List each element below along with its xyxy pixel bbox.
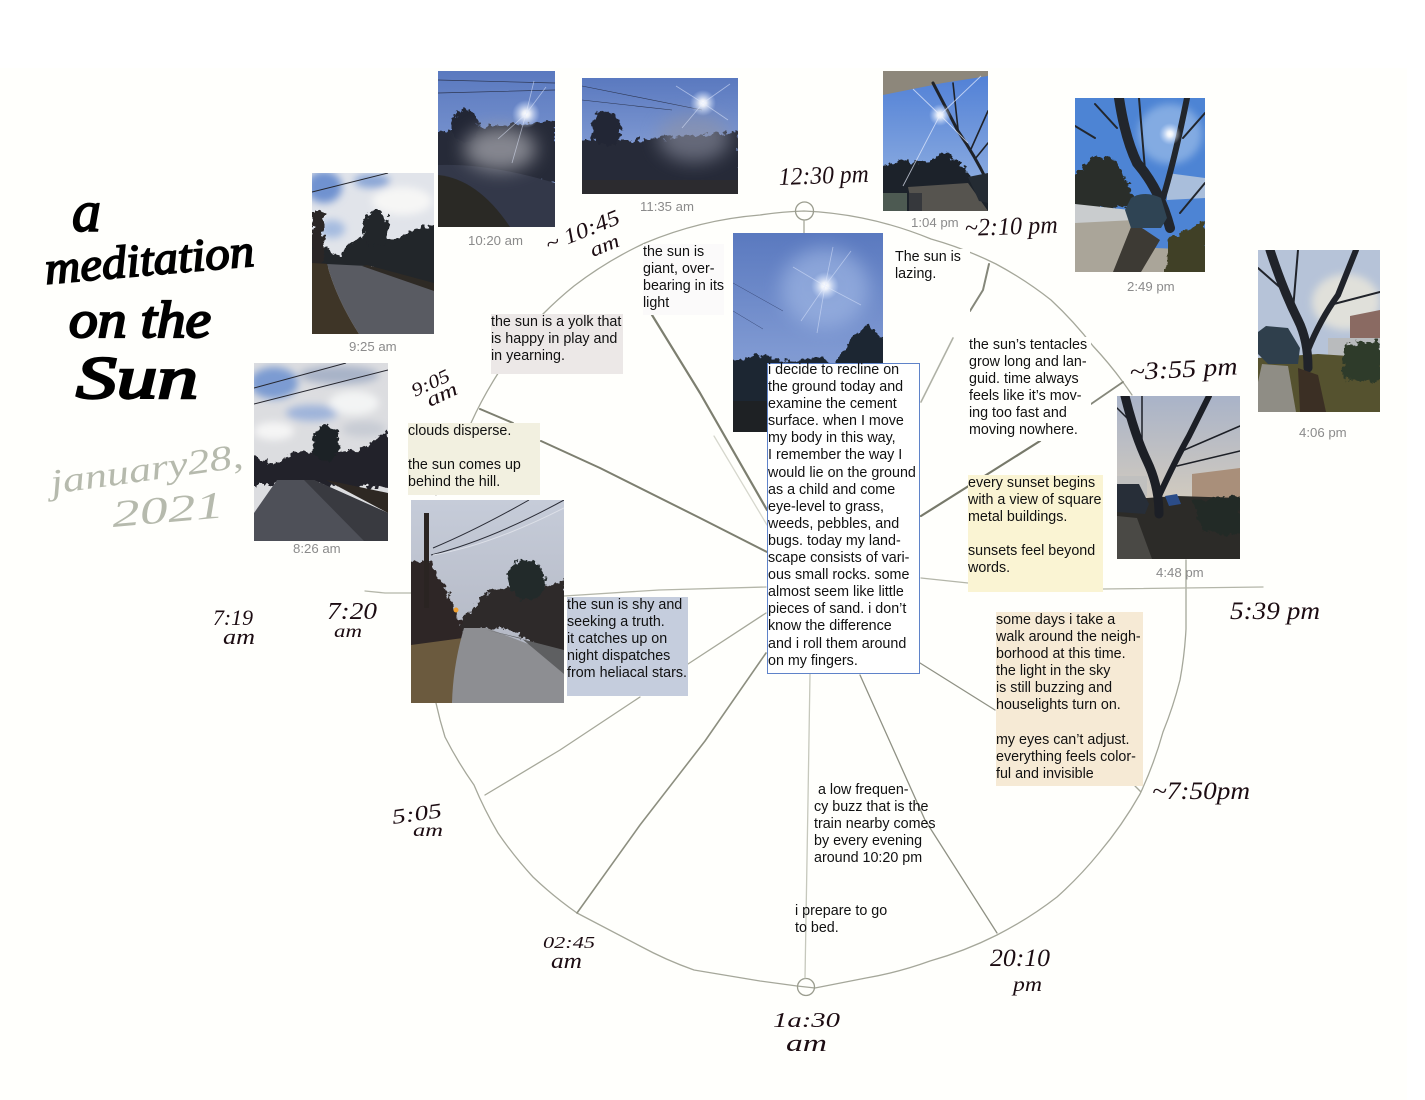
text: i prepare to go to bed: to bed.: [795, 920, 839, 936]
caption: 2:49 pm: 2:49 pm: [1127, 279, 1175, 294]
central text box: and i roll them around: [768, 636, 906, 652]
time: 5:05 am: 5:05: [390, 798, 443, 829]
text: the sun is lazing: [895, 249, 970, 336]
title word: Sun: Sun: [76, 345, 198, 411]
text: low frequency buzz: by every evening: [814, 833, 922, 849]
central text box: almost seem like little: [768, 584, 904, 600]
photo: 4:48 pm: [1117, 396, 1240, 559]
central text box: ous small rocks. some: [768, 567, 909, 583]
title words: on the: on the: [69, 292, 211, 349]
time: 7:20 am: 7:20: [327, 599, 377, 625]
text: the sun's tentacles: feels like it’s mov-: [969, 388, 1082, 404]
time: 20:10 pm: [990, 945, 1051, 996]
central text box: i decide to recline on: [768, 362, 899, 378]
text: low frequency buzz: train nearby comes: [814, 816, 936, 832]
time: 7:19 am: 7:19: [213, 605, 253, 630]
central text box: examine the cement: [768, 396, 897, 412]
text: the sun is a yolk: [491, 314, 623, 374]
top marker circle: [796, 202, 814, 220]
text: every sunset: with a view of square: [968, 492, 1102, 508]
photo: 1:04 pm: [883, 71, 988, 211]
central text box: would lie on the ground: [768, 465, 916, 481]
text: the sun is a yolk: is happy in play and: [491, 331, 617, 347]
central text box: know the difference: [768, 618, 892, 634]
text: the sun is giant: [643, 244, 724, 315]
text: some days: ful and invisible: [996, 766, 1094, 782]
text: the sun is shy: seeking a truth.: [567, 614, 665, 630]
text: clouds disperse: clouds disperse.: [408, 423, 511, 439]
time: ~2:10 pm: ~2:10 pm: [964, 212, 1058, 242]
time: 9:05 am: [408, 366, 461, 412]
text: every sunset: words.: [968, 560, 1010, 576]
time: 02:45 am: am: [551, 948, 582, 973]
text: some days: everything feels color-: [996, 749, 1136, 765]
time: 1a:30 am: am: [786, 1031, 827, 1057]
time: 7:19 am: am: [223, 624, 255, 649]
time: 1a:30 am: [773, 1008, 841, 1057]
central text box: weeds, pebbles, and: [768, 516, 899, 532]
caption: 10:20 am: 10:20 am: [468, 233, 523, 248]
text: every sunset: sunsets feel beyond: [968, 543, 1095, 559]
text: the sun is shy: it catches up on: [567, 631, 667, 647]
title word: meditation: meditation: [42, 225, 256, 294]
text: some days: is still buzzing and: [996, 680, 1112, 696]
photo: 9:25 am: [312, 173, 434, 334]
text: i prepare to go to bed: i prepare to go: [795, 903, 887, 919]
time: 20:10 pm: pm: [1011, 972, 1042, 996]
caption: 9:25 am: 9:25 am: [349, 339, 397, 354]
text: the sun is a yolk: in yearning.: [491, 348, 565, 364]
text: some days: borhood at this time.: [996, 646, 1126, 662]
text: the sun is giant: light: [643, 295, 669, 311]
text: low frequency buzz: cy buzz that is the: [814, 799, 928, 815]
central text box: scape consists of vari-: [768, 550, 909, 566]
time: 9:05 am: am: [423, 378, 461, 412]
text: low frequency buzz: [814, 782, 936, 866]
text: the sun is shy: the sun is shy and: [567, 597, 682, 613]
text: the sun is shy: night dispatches: [567, 648, 670, 664]
time: ~10:45 am: ~ 10:45: [542, 204, 623, 257]
central text box: on my fingers.: [768, 653, 858, 669]
central text box: pieces of sand. i don’t: [768, 601, 906, 617]
text: the sun's tentacles: moving nowhere.: [969, 422, 1078, 438]
central text box: the ground today and: [768, 379, 903, 395]
text: clouds disperse: the sun comes up: [408, 457, 521, 473]
text: the sun's tentacles: [969, 337, 1091, 441]
time: 12:30 pm: 12:30 pm: [778, 161, 869, 191]
text: the sun's tentacles: grow long and lan-: [969, 354, 1087, 370]
bottom marker circle: [798, 978, 814, 996]
time: ~7:50pm: ~7:50pm: [1152, 778, 1250, 805]
time: 20:10 pm: 20:10: [990, 945, 1051, 972]
text: the sun's tentacles: ing too fast and: [969, 405, 1067, 421]
time: 9:05 am: 9:05: [408, 366, 453, 402]
text: some days: houselights turn on.: [996, 697, 1121, 713]
text: i prepare to go to bed: [795, 903, 887, 936]
text: low frequency buzz: around 10:20 pm: [814, 850, 922, 866]
text: the sun's tentacles: guid. time always: [969, 371, 1079, 387]
time: 02:45 am: 02:45: [543, 933, 595, 952]
central text box: surface. when I move: [768, 413, 904, 429]
photo: 12:30 pm: [733, 233, 883, 432]
text: clouds disperse: [408, 423, 540, 495]
photo: 11:35 am: [582, 78, 738, 194]
time: 5:05 am: am: [413, 820, 443, 840]
photo: 4:06 pm: [1258, 250, 1380, 412]
photo: 7:20 am: [411, 500, 564, 703]
photo: 2:49 pm: [1075, 98, 1205, 272]
hand-drawn circle: [436, 211, 1186, 988]
text: the sun is shy: from heliacal stars.: [567, 665, 687, 681]
time: 1a:30 am: 1a:30: [773, 1008, 841, 1032]
text: every sunset: every sunset begins: [968, 475, 1095, 491]
date line one: january28,: [43, 436, 245, 503]
text: every sunset: metal buildings.: [968, 509, 1067, 525]
text: some days: the light in the sky: [996, 663, 1110, 679]
central text box: as a child and come: [768, 482, 895, 498]
date line two: 2021: [110, 484, 225, 536]
text: some days: some days i take a: [996, 612, 1115, 628]
text: the sun is shy: [567, 597, 688, 696]
text: the sun is giant: the sun is: [643, 244, 704, 260]
caption: 1:04 pm: 1:04 pm: [911, 215, 959, 230]
text: the sun is giant: giant, over-: [643, 261, 715, 277]
time: 7:20 am: [327, 599, 377, 641]
time: ~10:45 am: am: [587, 230, 623, 262]
caption: 11:35 am: 11:35 am: [640, 199, 694, 214]
photo: 10:20 am: [438, 71, 555, 227]
time: 7:19 am: [213, 605, 255, 649]
text: some days: [996, 612, 1143, 786]
caption: 4:48 pm: 4:48 pm: [1156, 565, 1204, 580]
central text box: bugs. today my land-: [768, 533, 901, 549]
text: the sun is a yolk: the sun is a yolk that: [491, 314, 621, 330]
text: some days: my eyes can’t adjust.: [996, 732, 1130, 748]
central text box: I remember the way I: [768, 447, 902, 463]
text: the sun is lazing: The sun is: [895, 249, 961, 265]
text: every sunset: [968, 475, 1103, 592]
caption: 4:06 pm: 4:06 pm: [1299, 425, 1347, 440]
text: some days: walk around the neigh-: [996, 629, 1141, 645]
time: 5:05 am: [390, 798, 443, 840]
time: 7:20 am: am: [334, 621, 362, 641]
text: the sun is giant: bearing in its: [643, 278, 724, 294]
text: low frequency buzz: a low frequen-: [818, 782, 909, 798]
title word: a: a: [72, 179, 101, 244]
text: the sun is lazing: lazing.: [895, 266, 936, 282]
time: 5:39 pm: 5:39 pm: [1230, 598, 1320, 625]
spokes: [365, 220, 1263, 978]
text: the sun's tentacles: the sun’s tentacles: [969, 337, 1087, 353]
text: clouds disperse: behind the hill.: [408, 474, 500, 490]
photo: 8:26 am: [254, 363, 388, 541]
central text box: [767, 363, 920, 674]
central text box: my body in this way,: [768, 430, 896, 446]
time: ~3:55 pm: ~3:55 pm: [1129, 353, 1238, 386]
time: 02:45 am: [543, 933, 595, 973]
central text box: eye-level to grass,: [768, 499, 884, 515]
caption: 8:26 am: 8:26 am: [293, 541, 341, 556]
